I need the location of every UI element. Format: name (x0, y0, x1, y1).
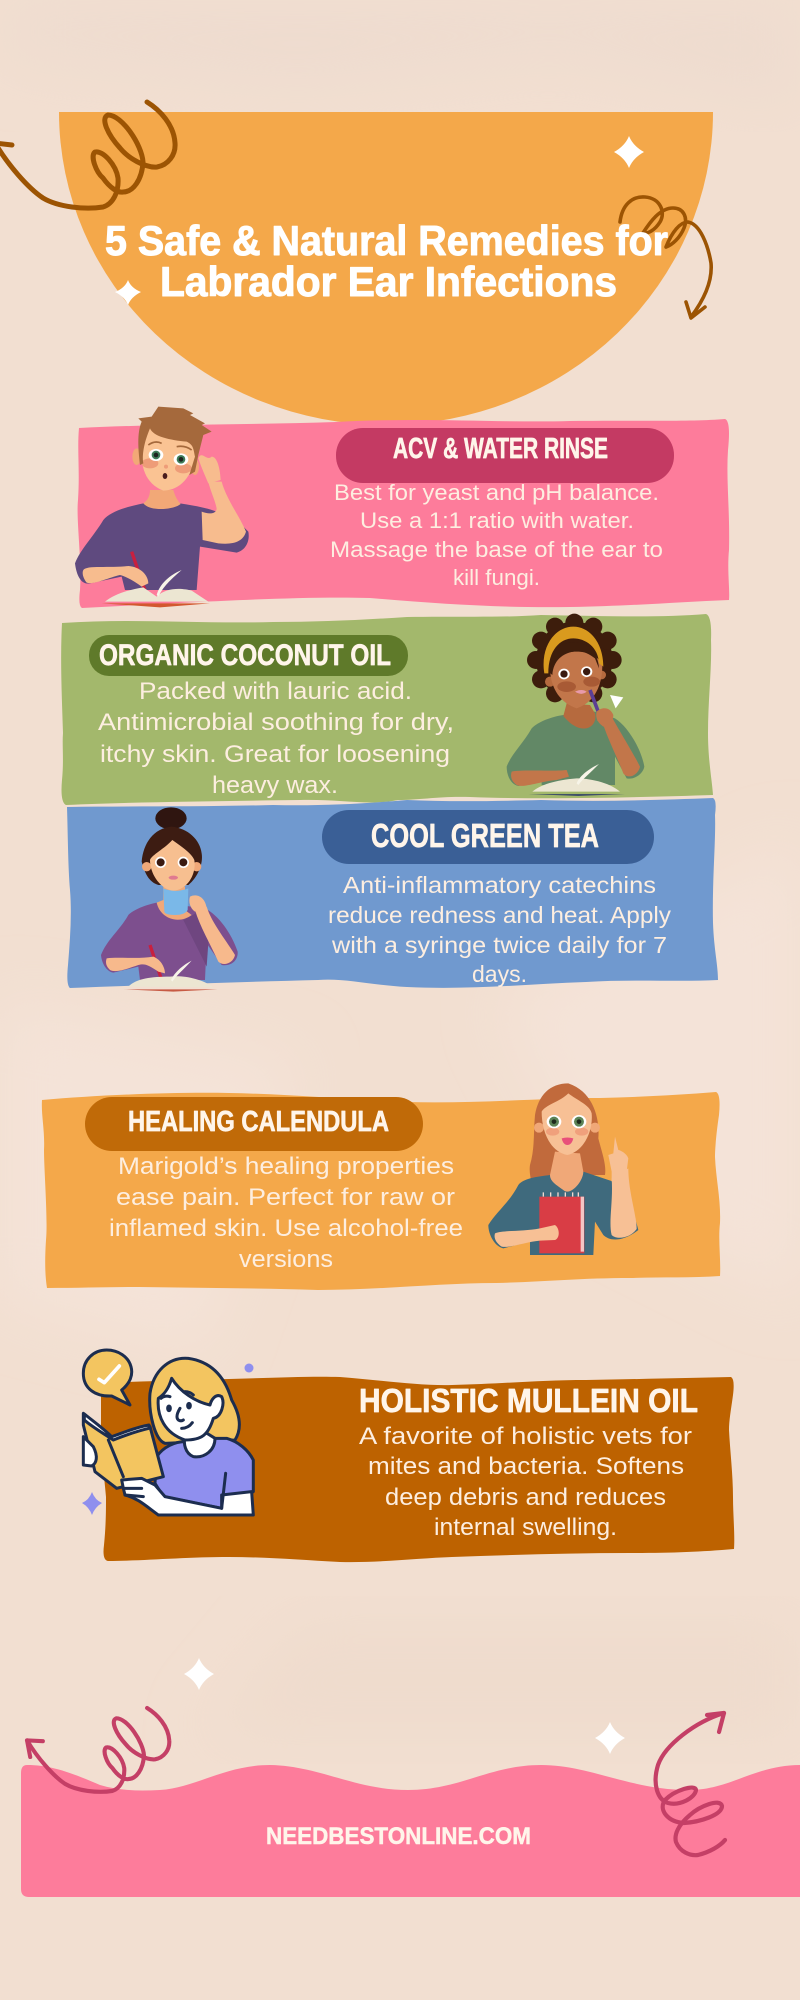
panel: healing calendula (42, 1083, 720, 1290)
icon: top-left brown arrow scribble (0, 102, 175, 208)
body text: mites and bacteria. Softens (368, 1453, 684, 1480)
body text (359, 1423, 692, 1541)
character: boy thinking (75, 407, 249, 607)
body text: inflamed skin. Use alcohol-free (109, 1215, 463, 1242)
panel background brown (101, 1377, 734, 1562)
body text: Massage the base of the ear to (330, 537, 663, 562)
pill heading (336, 428, 674, 483)
body text: itchy skin. Great for loosening (100, 741, 450, 768)
body text: Best for yeast and pH balance. (334, 480, 659, 505)
panel: ACV and water rinse (75, 407, 729, 608)
body text: kill fungi. (453, 565, 540, 590)
character: woman with headband (507, 614, 644, 796)
title: 5 Safe & Natural Remedies for (105, 217, 668, 264)
sparkle: footer right (595, 1722, 625, 1754)
body text: reduce redness and heat. Apply (328, 902, 672, 928)
pill heading (322, 810, 654, 864)
body text (330, 480, 663, 590)
body text (98, 678, 454, 799)
panel: cool green tea (67, 798, 718, 992)
sparkle: beside title (115, 280, 141, 305)
panel: organic coconut oil (61, 614, 713, 805)
heading: ORGANIC COCONUT OIL (99, 639, 391, 672)
title shape: orange half circle (59, 112, 713, 425)
heading: ACV & WATER RINSE (393, 433, 608, 465)
title: Labrador Ear Infections (160, 258, 617, 305)
icon: top-right brown arrow scribble (620, 197, 711, 318)
pill heading (89, 635, 408, 676)
icon: footer right arrow scribble (656, 1713, 725, 1855)
icon: speech bubble with check (83, 1350, 132, 1405)
character: woman with notebook pointing up (488, 1083, 638, 1255)
body text: Antimicrobial soothing for dry, (98, 709, 454, 736)
icon: lilac sparkle (82, 1492, 102, 1515)
body text: Packed with lauric acid. (139, 678, 412, 705)
body text: Marigold’s healing properties (118, 1153, 454, 1180)
sparkle: top right (614, 136, 644, 168)
character: woman drinking tea (101, 807, 238, 992)
heading: HOLISTIC MULLEIN OIL (359, 1382, 698, 1419)
body text: with a syringe twice daily for 7 (331, 932, 667, 958)
body text (109, 1153, 463, 1273)
footer band (21, 1765, 800, 1897)
footer background (21, 1765, 800, 1897)
panel: holistic mullein oil (83, 1350, 734, 1562)
body text: A favorite of holistic vets for (359, 1423, 692, 1450)
sparkle: footer left (184, 1658, 214, 1690)
body text: Anti-inflammatory catechins (343, 872, 656, 898)
body text: versions (239, 1246, 333, 1273)
body text: heavy wax. (212, 772, 338, 799)
pill heading (85, 1097, 423, 1151)
footer url: NEEDBESTONLINE.COM (266, 1823, 531, 1850)
panel background green (61, 614, 713, 805)
icon: footer left arrow scribble (27, 1708, 169, 1792)
body text: days. (472, 961, 527, 987)
panel background blue (67, 798, 718, 988)
title (105, 217, 668, 305)
icon: lilac dot (244, 1364, 254, 1372)
body text: Use a 1:1 ratio with water. (360, 508, 634, 533)
body text: deep debris and reduces (385, 1484, 666, 1511)
character: woman reading with speech bubble (83, 1350, 253, 1515)
panel background orange (42, 1092, 720, 1290)
panel background pink (78, 419, 729, 608)
body text: internal swelling. (434, 1514, 617, 1541)
body text: ease pain. Perfect for raw or (116, 1184, 455, 1211)
heading: COOL GREEN TEA (371, 817, 599, 854)
body text (328, 872, 672, 987)
heading: HEALING CALENDULA (128, 1106, 389, 1138)
